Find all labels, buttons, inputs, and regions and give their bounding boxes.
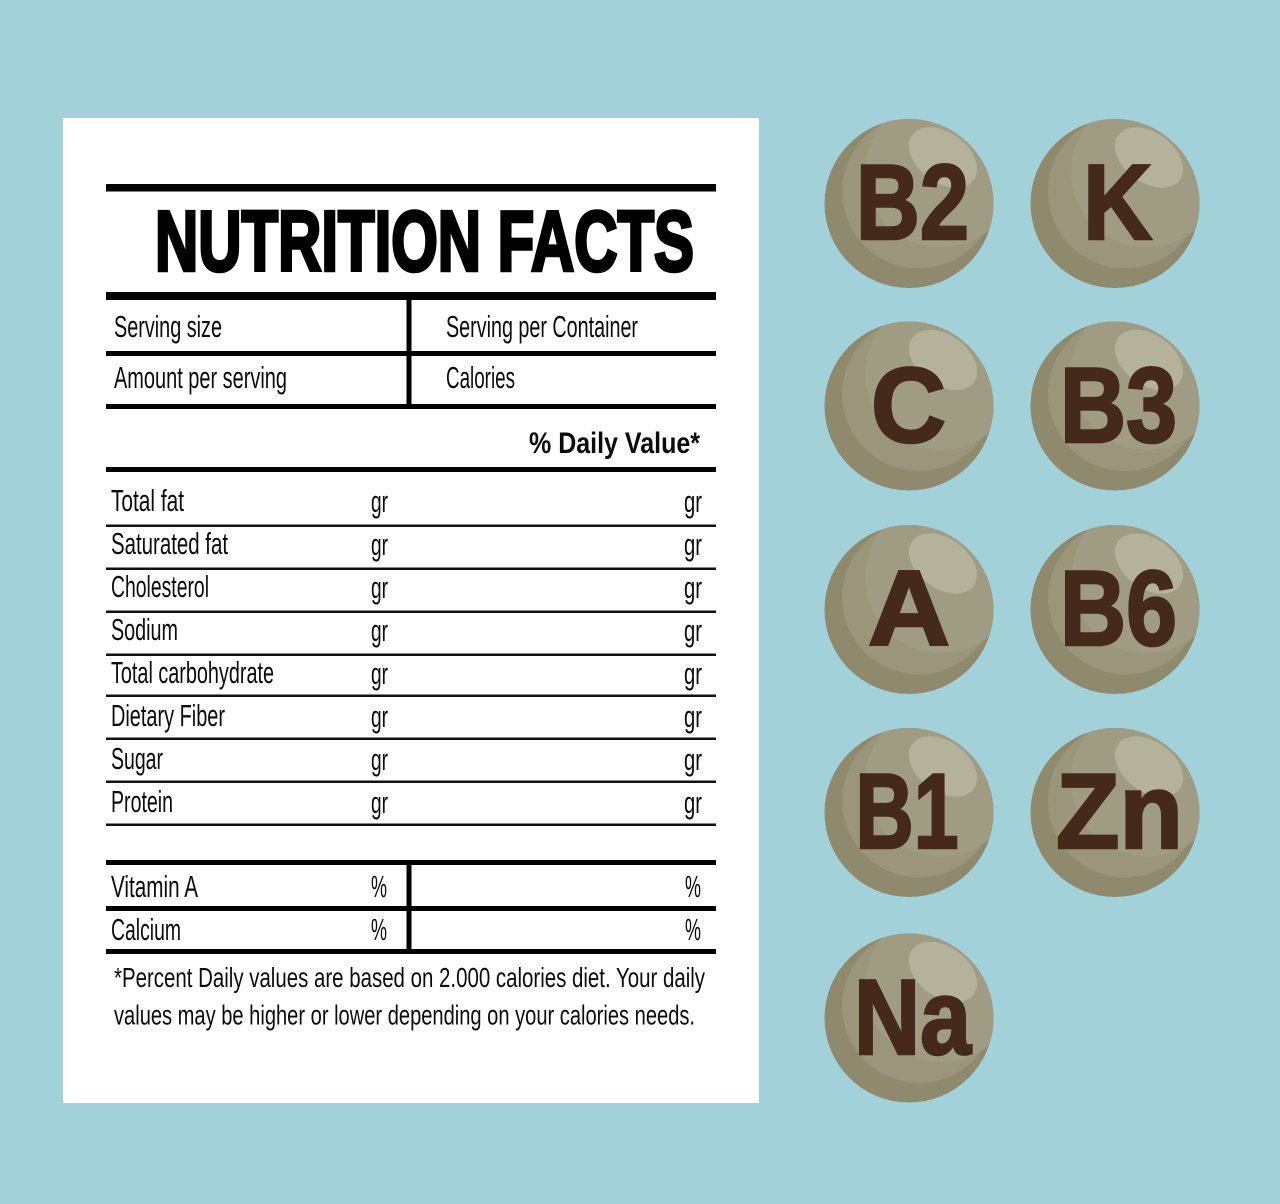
title: NUTRITION FACTS [155,194,694,290]
icon: vitamin B1 [824,704,1017,897]
nutrient table: Sodium [111,612,178,647]
header rules [106,184,716,472]
vitamin and mineral table: Vitamin A [111,869,198,904]
vitamin and mineral table: % [685,912,701,947]
icon: vitamin B2 [824,96,1017,288]
icon: vitamin B3: B3 [1060,345,1177,465]
serving information: Calories [446,360,515,395]
nutrient table: Protein [111,784,173,819]
icon: vitamin B6: B6 [1060,548,1177,668]
nutrient table: gr [684,527,702,562]
vitamin and mineral table: % [371,912,387,947]
panel: nutrition facts label [63,118,759,1103]
icon: sodium Na [824,910,1017,1102]
nutrient table: gr [684,699,702,734]
footnote [114,962,705,1030]
serving information [114,309,638,395]
nutrient table: gr [371,785,388,820]
nutrient table: gr [371,656,388,691]
daily value heading: % Daily Value* [529,427,700,460]
serving information: Serving per Container [446,309,638,344]
footnote: *Percent Daily values are based on 2.000 calories diet. Your daily [114,962,705,993]
nutrient table: gr [371,742,388,777]
icon: vitamin K: K [1083,142,1152,262]
nutrient table: gr [684,484,702,519]
nutrient table: Dietary Fiber [111,698,225,733]
icon: vitamin B1: B1 [856,751,958,871]
nutrient table: Saturated fat [111,526,228,561]
nutrient table: gr [684,742,702,777]
icon: vitamin B2: B2 [856,142,969,262]
icon: vitamin A: A [868,548,950,668]
footnote: values may be higher or lower depending on your calories needs. [114,1000,695,1030]
icon: vitamin K [1030,96,1223,288]
nutrient table: gr [684,656,702,691]
nutrient table: gr [684,785,702,820]
nutrient table: Total carbohydrate [111,655,274,690]
nutrient table: gr [684,570,702,605]
vitamin and mineral table: Calcium [111,912,181,947]
vitamin and mineral table: % [371,869,387,904]
icon: vitamin C [824,298,1017,490]
icon: vitamin C: C [871,345,946,465]
icon: zinc Zn: Zn [1056,751,1183,871]
serving information: Serving size [114,309,222,344]
icon: zinc Zn [1030,704,1223,897]
nutrient table: Total fat [111,483,184,518]
nutrient table: Sugar [111,741,163,776]
serving information: Amount per serving [114,360,287,395]
nutrient table: Cholesterol [111,569,209,604]
icon: vitamin B3 [1030,298,1223,490]
icon: vitamin B6 [1030,502,1223,694]
icon: vitamin A [824,502,1017,694]
nutrient table: gr [684,613,702,648]
nutrient table [106,483,716,826]
nutrient table: gr [371,570,388,605]
nutrient table: gr [371,484,388,519]
nutrient table: gr [371,699,388,734]
nutrient table: gr [371,613,388,648]
vitamin and mineral table [106,860,716,954]
icon: sodium Na: Na [854,957,972,1077]
nutrient table: gr [371,527,388,562]
vitamin and mineral table: % [685,869,701,904]
